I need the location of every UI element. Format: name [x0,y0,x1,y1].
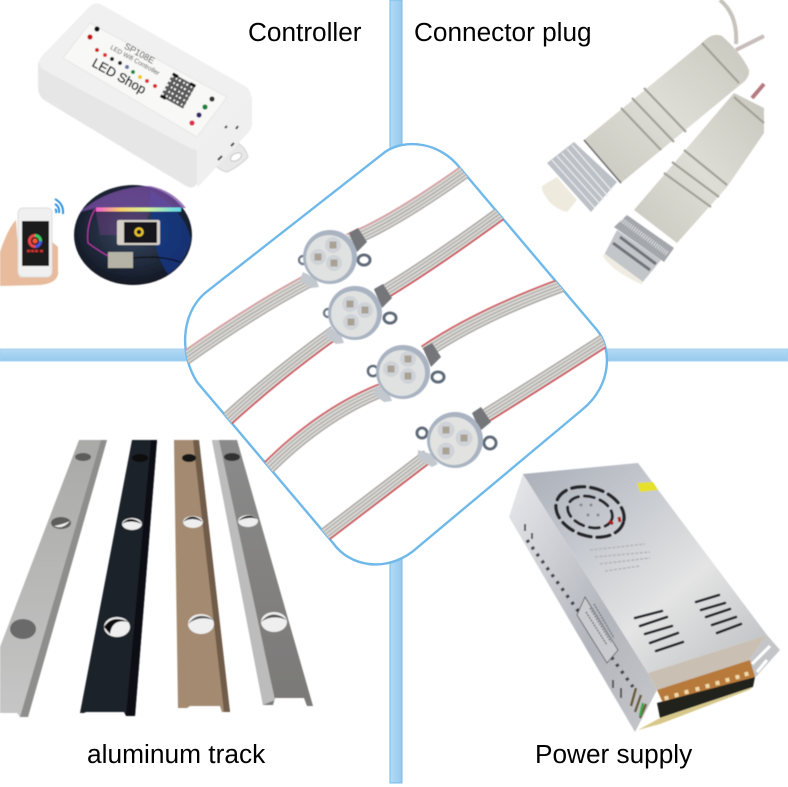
vent slots left [635,611,683,651]
LED module 2 [324,284,396,344]
upper plug [542,35,749,212]
icon: SP108E controller box: SP108E [123,41,156,66]
icon: round app and RGB strip photo [74,185,192,285]
printed specs [590,544,650,571]
heading: Connector plug: Connector plug [414,17,592,47]
left side panel [509,474,657,732]
track 3 bronze [174,440,230,712]
heading: Power supply: Power supply [535,739,693,769]
vent slots right [696,595,741,633]
yellow sticker [637,482,658,492]
lower plug [604,93,764,283]
icon: connector plug pair [542,0,764,283]
icon: SP108E controller box: LED Shop [90,55,149,97]
track 4 grey [212,440,313,706]
heading: Controller: Controller [248,17,362,47]
icon: aluminum tracks [0,440,313,717]
LED module 1 [299,228,370,288]
ribbon cable 1 [176,163,470,362]
track 2 black [80,440,157,716]
icon: SP108E controller box: LED Wifi Controller [109,44,161,78]
LED module 4 [417,407,496,468]
side ventilation holes [527,540,633,687]
wires [720,0,764,98]
ribbon cable 2 [224,210,509,427]
rating label [577,597,618,663]
icon: SP108E controller box [38,4,252,187]
ribbon cable 3 [261,278,565,472]
track 1 silver [0,440,107,717]
terminal block [648,635,767,690]
icon: phone in hand with wifi signal [0,199,63,286]
icon: power supply unit [509,463,780,732]
LED module 3 [368,343,444,402]
cooling fan slots [549,478,631,546]
heading: aluminum track: aluminum track [87,739,266,769]
panel: centre LED pixel strings [176,144,612,564]
ribbon cable 4 [318,338,612,545]
end plate [745,635,780,680]
top cover [523,463,767,673]
